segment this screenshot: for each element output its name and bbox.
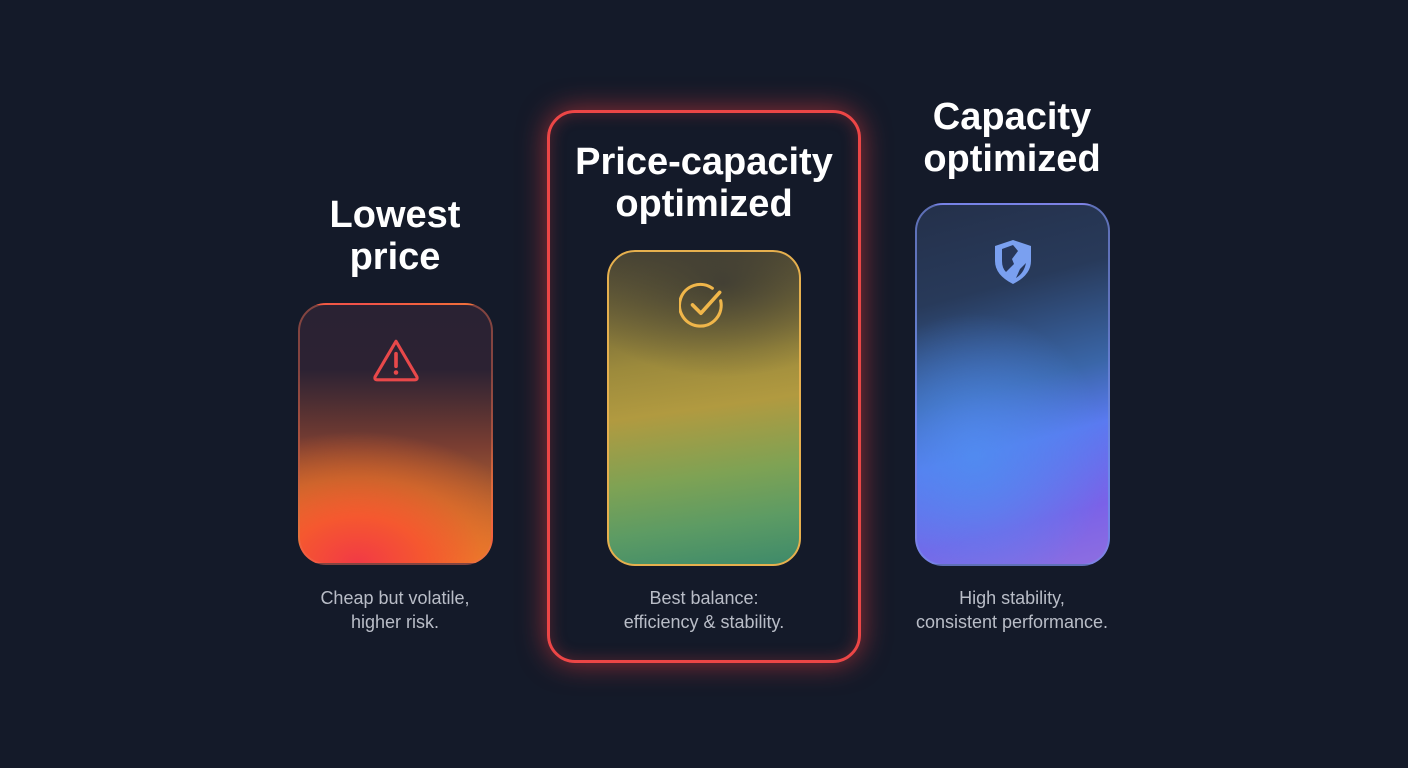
caption: price-capacity: efficiency & stability. [624,612,784,632]
caption: price-capacity: Best balance: [649,588,759,608]
card: price-capacity [607,250,801,566]
caption: capacity optimized: High stability, [959,588,1065,608]
title: lowest price: price [350,236,440,278]
title: capacity optimized: optimized [923,138,1101,180]
caption: capacity optimized: consistent performance. [916,612,1108,632]
icon: warning [373,340,419,382]
title: capacity optimized: Capacity [933,96,1091,138]
title: capacity optimized [923,96,1101,180]
caption: lowest price: Cheap but volatile, [320,588,470,608]
icon: shield [995,240,1031,284]
title: price-capacity optimized [575,141,833,225]
panel: highlighted price-capacity [547,110,861,663]
card: lowest price [298,303,493,565]
title: price-capacity optimized: optimized [615,183,793,225]
caption: price-capacity [624,588,784,632]
caption: capacity optimized [916,588,1108,632]
card: capacity optimized [915,203,1110,566]
caption: lowest price: higher risk. [351,612,439,632]
caption: lowest price [320,588,470,632]
title: lowest price [330,194,460,278]
title: price-capacity optimized: Price-capacity [575,141,833,183]
title: lowest price: Lowest [330,194,460,236]
icon: check circle [679,282,723,328]
